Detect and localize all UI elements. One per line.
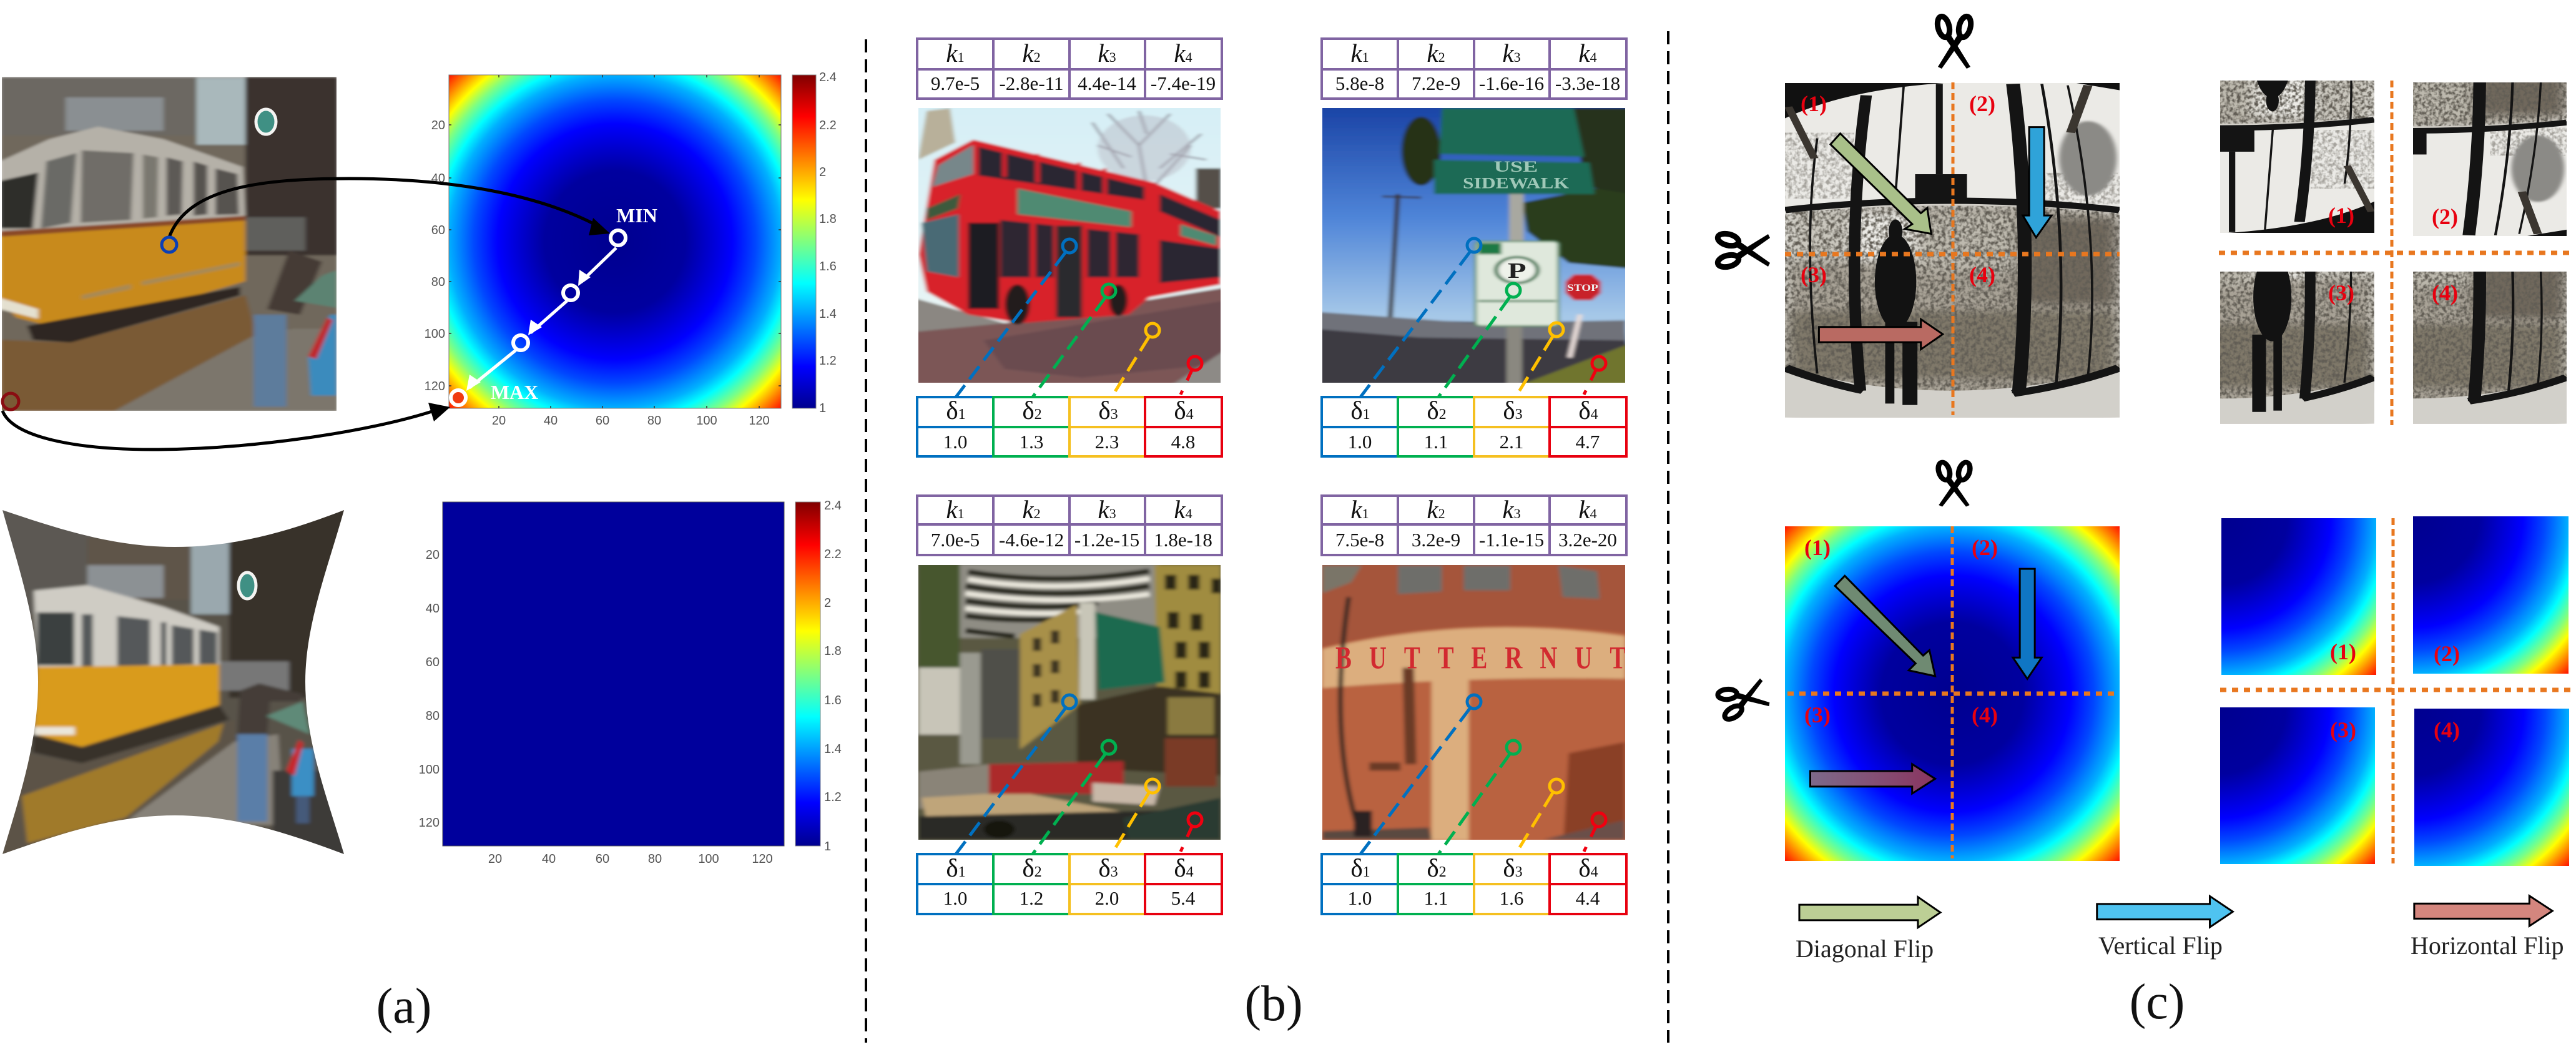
region labels on heat map	[1804, 535, 1998, 727]
axis labels: heat map 1	[425, 119, 770, 428]
region labels on heat map: (1)	[1804, 535, 1831, 560]
colorbar 1: 2	[819, 165, 826, 179]
table: k values, bus: 4.4e-14	[1078, 72, 1136, 94]
table: delta values, city: δ4	[1174, 853, 1194, 882]
table: k values, brick wall: 3.2e-20	[1558, 529, 1617, 551]
table: k values, street sign: k4	[1578, 39, 1597, 67]
table: k values, street sign: 5.8e-8	[1335, 72, 1384, 94]
heat map: original distortion	[449, 75, 781, 408]
region labels on photo: (3)	[1801, 262, 1827, 287]
cut lines on heat map	[1787, 526, 2120, 858]
table: delta values, sign: δ2	[1427, 396, 1447, 425]
region labels on photo: (2)	[1969, 91, 1995, 116]
photo: city street	[912, 560, 1227, 846]
axis labels: heat map 2: 20	[426, 548, 440, 562]
photo: street sign: P	[1508, 259, 1526, 283]
axis labels: heat map 1: 40	[431, 172, 445, 185]
colorbar 1: 2.2	[819, 119, 837, 132]
axis labels: heat map 2: 100	[698, 852, 719, 866]
panel: (c) flip augmentation	[1715, 0, 2572, 1030]
flipped photo piece 4	[2413, 272, 2567, 424]
table: delta values, brick wall: 4.4	[1576, 887, 1600, 909]
table: k values, bus: k2	[1022, 39, 1041, 67]
marker: dark red point on tram	[2, 393, 19, 410]
region labels on heat map: (3)	[1804, 702, 1831, 727]
region labels on heat pieces	[2330, 639, 2460, 742]
table: k values, brick wall: k1	[1350, 495, 1369, 524]
axis labels: heat map 1: 120	[425, 380, 445, 393]
table: k values, bus: k3	[1098, 39, 1116, 67]
markers: sign sample points	[1360, 238, 1606, 397]
table: delta values, sign: 4.7	[1576, 431, 1600, 453]
colorbar 2: 2.4	[824, 499, 842, 513]
table: k values, brick wall	[1322, 495, 1626, 555]
table: delta values, bus: δ3	[1098, 396, 1118, 425]
table: delta values, brick wall: 1.6	[1500, 887, 1523, 909]
region labels on pieces: (4)	[2432, 280, 2458, 305]
table: k values, brick wall: k4	[1578, 495, 1597, 524]
table: delta values, brick wall: δ1	[1350, 853, 1370, 882]
table: delta values, city: 5.4	[1171, 887, 1196, 909]
table: delta values, brick wall: 1.1	[1424, 887, 1448, 909]
table: delta values, bus: 2.3	[1095, 431, 1119, 453]
colorbar 2: 2.2	[824, 548, 842, 561]
colorbar 2: 1.2	[824, 790, 842, 804]
flipped photo piece 2	[2413, 82, 2567, 236]
axis labels: heat map 1: 40	[544, 414, 558, 428]
legend text: diagonal flip: Diagonal Flip	[1796, 935, 1934, 963]
photo: brick wall BUTTERNUT: BUTTERNUT	[1335, 641, 1626, 676]
table: k values, brick wall: k3	[1502, 495, 1521, 524]
colorbar 1: 1	[819, 401, 826, 415]
axis labels: heat map 1: 120	[749, 414, 770, 428]
colorbar 2: 2	[824, 596, 831, 610]
arrow: horizontal red on photo	[1819, 319, 1943, 350]
table: delta values, sign: δ4	[1578, 396, 1598, 425]
caption (b): (b)	[1244, 976, 1303, 1031]
photo: distorted tram	[0, 77, 338, 411]
colorbar 1	[792, 71, 837, 415]
arrows and points: MIN to MAX path	[451, 230, 626, 405]
table: delta values, bus: 1.0	[943, 431, 967, 453]
table: delta values, city: 2.0	[1095, 887, 1119, 909]
photo: fisheye window silhouette	[1785, 83, 2120, 417]
table: k values, brick wall: -1.1e-15	[1479, 529, 1544, 551]
region labels on pieces: (2)	[2432, 204, 2458, 229]
flipped photo piece 1	[2220, 81, 2374, 233]
heat piece 2	[2413, 516, 2569, 674]
region labels on heat map: (2)	[1972, 535, 1998, 560]
table: delta values, city: 1.0	[943, 887, 967, 909]
icon: scissors top 2	[1937, 461, 1972, 507]
table: delta values, brick wall: δ2	[1427, 853, 1447, 882]
table: delta values, sign	[1322, 396, 1626, 456]
cut lines on photo	[1785, 82, 2120, 415]
table: k values, bus: -2.8e-11	[999, 72, 1064, 94]
table: k values, city: -1.2e-15	[1074, 529, 1139, 551]
photo: street sign: USE	[1494, 158, 1538, 175]
axis labels: heat map 1: 20	[492, 414, 506, 428]
colorbar 2: 1	[824, 840, 831, 853]
table: delta values, city: 1.2	[1020, 887, 1043, 909]
colorbar 2: 1.8	[824, 644, 842, 658]
table: delta values, brick wall: δ4	[1578, 853, 1598, 882]
legend arrow: diagonal flip	[1799, 897, 1940, 928]
axis labels: heat map 2: 40	[542, 852, 556, 866]
arrow: diagonal green on photo	[1831, 134, 1931, 234]
axis labels: heat map 1: 100	[696, 414, 717, 428]
table: delta values, city	[917, 853, 1222, 914]
colorbar 1: 1.6	[819, 260, 837, 273]
table: k values, city: k3	[1098, 495, 1116, 524]
table: delta values, city: δ2	[1022, 853, 1042, 882]
cut lines between heat pieces	[2220, 518, 2572, 863]
table: k values, street sign: k1	[1350, 39, 1369, 67]
colorbar 2: 1.4	[824, 742, 842, 756]
colorbar 1: 1.8	[819, 212, 837, 226]
table: k values, street sign: -3.3e-18	[1555, 72, 1620, 94]
panel: (a) distortion map	[0, 71, 842, 1034]
table: k values, bus: k1	[946, 39, 965, 67]
colorbar 2	[795, 499, 842, 853]
heat piece 3	[2220, 707, 2375, 864]
axis labels: heat map 1: 80	[647, 414, 661, 428]
caption (c): (c)	[2130, 975, 2185, 1030]
arrow: vertical blue on photo	[2023, 127, 2052, 237]
table: k values, city: k2	[1022, 495, 1041, 524]
markers: city sample points	[956, 695, 1202, 854]
markers: bus sample points	[956, 239, 1202, 397]
table: delta values, bus	[917, 396, 1222, 456]
label: MIN: MIN	[616, 204, 657, 227]
table: delta values, brick wall	[1322, 853, 1626, 914]
table: delta values, bus: 1.3	[1020, 431, 1043, 453]
table: delta values, sign: 2.1	[1500, 431, 1523, 453]
table: k values, street sign: k2	[1427, 39, 1445, 67]
markers: brick sample points	[1360, 695, 1606, 854]
panel: (b) sample images	[912, 39, 1631, 1031]
heat map: full distortion	[1785, 526, 2120, 861]
arrow: tram corner to MAX	[2, 403, 450, 450]
table: k values, street sign: 7.2e-9	[1412, 72, 1460, 94]
axis labels: heat map 2: 80	[426, 709, 440, 723]
table: k values, street sign: k3	[1502, 39, 1521, 67]
table: delta values, bus: 4.8	[1171, 431, 1195, 453]
photo: corrected tram	[0, 505, 349, 862]
arrow: horizontal on heat map	[1810, 764, 1935, 794]
table: k values, bus	[917, 39, 1222, 99]
region labels on photo	[1801, 91, 1995, 287]
table: k values, bus: 9.7e-5	[931, 72, 980, 94]
region labels on heat pieces: (1)	[2330, 639, 2356, 664]
table: delta values, sign: δ3	[1503, 396, 1523, 425]
caption (a): (a)	[376, 979, 431, 1034]
region labels on pieces: (3)	[2328, 280, 2354, 305]
table: delta values, bus: δ2	[1022, 396, 1042, 425]
arrow: tram centre to MIN	[169, 179, 610, 237]
marker: teal circle on corrected tram	[238, 573, 256, 599]
axis labels: heat map 1: 20	[431, 119, 445, 132]
axis labels: heat map 2: 80	[648, 852, 662, 866]
table: delta values, brick wall: 1.0	[1348, 887, 1372, 909]
axis labels: heat map 2: 20	[488, 852, 502, 866]
table: delta values, sign: 1.1	[1424, 431, 1448, 453]
region labels on pieces: (1)	[2328, 203, 2354, 228]
table: k values, street sign: -1.6e-16	[1479, 72, 1544, 94]
table: k values, city: 7.0e-5	[931, 529, 980, 551]
table: k values, brick wall: 3.2e-9	[1412, 529, 1460, 551]
axis labels: heat map 1: 60	[431, 224, 445, 237]
axis labels: heat map 1: 60	[596, 414, 609, 428]
icon: scissors top 1	[1935, 15, 1973, 69]
table: delta values, city: δ3	[1098, 853, 1118, 882]
heat map: corrected uniform	[443, 502, 784, 846]
flipped photo piece 3	[2220, 272, 2374, 424]
axis labels: heat map 2: 40	[426, 602, 440, 616]
region labels on photo: (4)	[1969, 262, 1995, 287]
photo: brick wall BUTTERNUT	[1315, 560, 1631, 846]
arrow: vertical on heat map	[2013, 569, 2042, 679]
cut lines between pieces	[2219, 81, 2570, 425]
region labels on heat pieces: (2)	[2434, 641, 2460, 666]
table: k values, street sign	[1322, 39, 1626, 99]
label: MAX: MAX	[491, 381, 538, 403]
table: k values, bus: k4	[1174, 39, 1192, 67]
region labels on photo: (1)	[1801, 91, 1827, 116]
region labels on heat pieces: (3)	[2330, 717, 2356, 742]
table: k values, city	[917, 495, 1222, 555]
colorbar 2: 1.6	[824, 694, 842, 707]
photo: street sign	[1315, 106, 1631, 386]
region labels on pieces	[2328, 203, 2458, 305]
colorbar 1: 1.4	[819, 307, 837, 321]
table: k values, bus: -7.4e-19	[1151, 72, 1216, 94]
axis labels: heat map 2: 60	[596, 852, 609, 866]
divider left	[865, 39, 867, 1043]
table: delta values, bus: δ4	[1174, 396, 1194, 425]
legend arrow: horizontal flip	[2414, 896, 2552, 926]
region labels on heat pieces: (4)	[2434, 717, 2460, 742]
icon: scissors left 2	[1715, 676, 1771, 722]
heat piece 1	[2221, 518, 2376, 675]
divider right	[1667, 31, 1669, 1043]
table: k values, brick wall: 7.5e-8	[1335, 529, 1384, 551]
icon: scissors left 1	[1716, 232, 1770, 269]
table: k values, brick wall: k2	[1427, 495, 1445, 524]
photo: street sign: STOP	[1567, 282, 1598, 293]
heat piece 4	[2414, 709, 2569, 866]
axis labels: heat map 2: 60	[426, 656, 440, 669]
axis labels: heat map 2	[419, 548, 773, 866]
table: k values, city: 1.8e-18	[1154, 529, 1212, 551]
marker: blue point on tram	[162, 237, 177, 252]
axis labels: heat map 1: 100	[425, 327, 445, 341]
table: delta values, sign: 1.0	[1348, 431, 1372, 453]
table: k values, city: k1	[946, 495, 965, 524]
axis labels: heat map 1: 80	[431, 275, 445, 289]
arrow: diagonal on heat map	[1835, 576, 1935, 676]
table: delta values, sign: δ1	[1350, 396, 1370, 425]
axis labels: heat map 2: 100	[419, 763, 440, 777]
axis labels: heat map 2: 120	[752, 852, 773, 866]
table: k values, city: k4	[1174, 495, 1192, 524]
table: delta values, bus: δ1	[946, 396, 966, 425]
colorbar 1: 1.2	[819, 354, 837, 368]
legend text: horizontal flip: Horizontal Flip	[2411, 932, 2564, 960]
legend text: vertical flip: Vertical Flip	[2098, 932, 2223, 960]
region labels on heat map: (4)	[1972, 702, 1998, 727]
table: k values, city: -4.6e-12	[999, 529, 1064, 551]
table: delta values, city: δ1	[946, 853, 966, 882]
colorbar 1: 2.4	[819, 71, 837, 84]
photo: red bus	[912, 106, 1227, 386]
table: delta values, brick wall: δ3	[1503, 853, 1523, 882]
legend arrow: vertical flip	[2097, 896, 2233, 927]
photo: street sign: SIDEWALK	[1463, 174, 1569, 192]
axis labels: heat map 2: 120	[419, 816, 440, 830]
marker: teal circle on tram photo	[256, 109, 276, 134]
